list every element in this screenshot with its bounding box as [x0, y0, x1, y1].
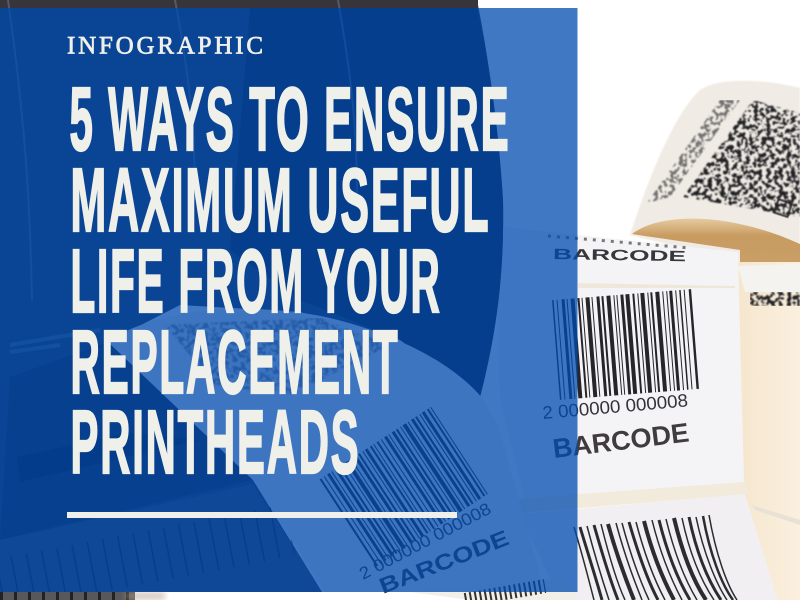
title: REPLACEMENT [70, 313, 400, 413]
title [70, 70, 510, 493]
eyebrow: INFOGRAPHIC: INFOGRAPHIC [67, 32, 263, 60]
curved label caption: BARCODE [376, 525, 512, 599]
upper label roll with QR codes [630, 81, 800, 268]
translucent blue panel [0, 8, 578, 592]
printer body [0, 0, 503, 592]
printer top edge above panel [0, 0, 478, 8]
main barcode digits: 2 000000 000008 [542, 390, 689, 423]
printer highlights [8, 0, 357, 352]
divider rule [67, 512, 457, 518]
cream roll at right [733, 262, 800, 600]
top barcode label text: BARCODE [553, 246, 686, 265]
title: PRINTHEADS [70, 393, 360, 493]
curved label barcode [348, 450, 460, 523]
main barcode caption: BARCODE [551, 417, 691, 464]
curved label at lower left [108, 309, 578, 600]
printer front panel and vents [0, 342, 322, 600]
lower curved barcode [574, 515, 737, 600]
main barcode bars [556, 339, 695, 350]
printer right dark housing [230, 8, 503, 397]
top label digits [548, 236, 690, 248]
curved label digits: 2 000000 000008 [356, 499, 494, 584]
faded QR on curved label [165, 318, 390, 395]
barcode label sheet [495, 226, 778, 600]
